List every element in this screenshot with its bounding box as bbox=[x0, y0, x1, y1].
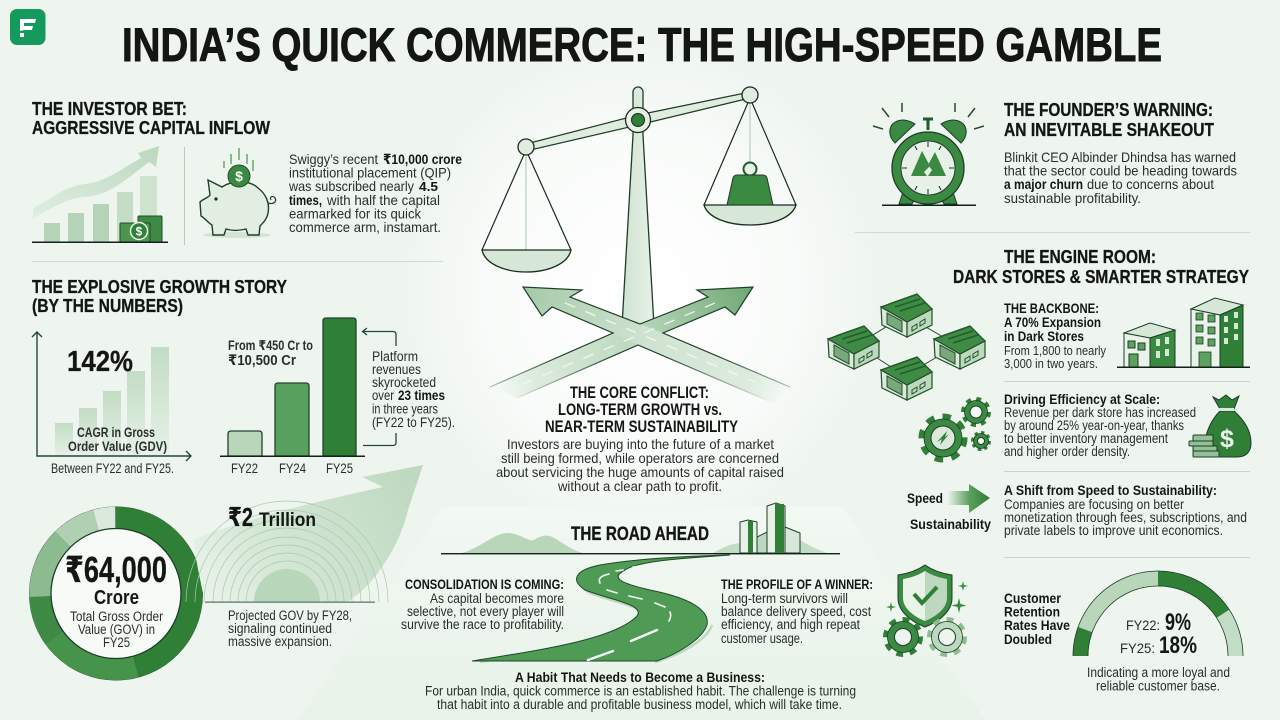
panel: the road ahead bbox=[401, 503, 873, 712]
illustration: winding road bbox=[472, 555, 730, 662]
text: a habit that needs to become a business: For urban India, quick commerce is an established habit. The challenge is turning bbox=[425, 684, 856, 698]
icon: buildings bbox=[1117, 298, 1250, 368]
chart: platform revenue bars: ₹10,500 Cr bbox=[228, 353, 296, 369]
icon: speed to sustainability arrow: Speed bbox=[907, 490, 943, 506]
text: core conflict: LONG-TERM GROWTH vs. bbox=[558, 401, 722, 419]
text: the profile of a winner: Long-term survivors will bbox=[721, 591, 848, 606]
text: platform revenues note: revenues bbox=[372, 362, 421, 377]
chart: total GOV donut: FY25 bbox=[103, 635, 130, 650]
text: the backbone: in Dark Stores bbox=[1004, 329, 1084, 344]
text: founder's warning: Blinkit CEO Albinder Dhindsa has warned bbox=[1004, 149, 1236, 165]
panel: the founder's warning bbox=[873, 100, 1237, 206]
text: the backbone bbox=[1004, 301, 1106, 371]
icon: shield with gears bbox=[886, 565, 968, 654]
text: investor bet body: with half the capital bbox=[326, 192, 440, 208]
chart: total GOV donut: ₹64,000 bbox=[65, 549, 167, 590]
heading: growth story: THE EXPLOSIVE GROWTH STORY bbox=[32, 277, 287, 297]
chart: projected growth arrow: Projected GOV by FY28, bbox=[228, 608, 352, 623]
heading: engine room bbox=[953, 247, 1249, 287]
text: platform revenues note: in three years bbox=[372, 402, 438, 416]
icon: piggy bank: $ bbox=[235, 168, 243, 184]
text: platform revenues note: over bbox=[372, 388, 394, 403]
chart: customer retention gauge: 9% bbox=[1165, 609, 1191, 636]
text: founder's warning: that the sector could be heading towards bbox=[1004, 162, 1237, 178]
text: platform revenues note bbox=[372, 349, 455, 430]
chart: customer retention gauge: FY25: bbox=[1120, 640, 1155, 656]
illustration: landscape and city bbox=[441, 503, 840, 554]
text: core conflict bbox=[496, 384, 784, 494]
text: a shift from speed to sustainability bbox=[1004, 482, 1247, 538]
text: a habit that needs to become a business: that habit into a durable and profitable business model, which will take time. bbox=[437, 697, 842, 712]
text: the backbone: From 1,800 to nearly bbox=[1004, 343, 1106, 358]
chart: total GOV donut: Value (GOV) in bbox=[78, 622, 155, 637]
text: investor bet body bbox=[288, 151, 462, 235]
text: platform revenues note: Platform bbox=[372, 349, 418, 364]
panel: the core conflict bbox=[482, 87, 796, 494]
text: a shift from speed to sustainability: private labels to improve unit economics. bbox=[1004, 523, 1223, 538]
chart: customer retention gauge: Retention bbox=[1004, 604, 1060, 620]
chart: total GOV donut: Crore bbox=[94, 587, 139, 609]
text: investor bet body: institutional placement (QIP) bbox=[289, 164, 451, 180]
chart: platform revenue bars: FY24 bbox=[279, 461, 306, 476]
icon: piggy bank bbox=[200, 148, 276, 238]
chart: platform revenue bars bbox=[220, 318, 365, 476]
chart: rising bars with arrow and cash bbox=[32, 146, 168, 243]
text: a shift from speed to sustainability: A Shift from Speed to Sustainability: bbox=[1004, 482, 1217, 498]
text: investor bet body: was subscribed nearly bbox=[288, 178, 414, 194]
chart: projected growth arrow bbox=[186, 465, 423, 649]
heading: growth story: (BY THE NUMBERS) bbox=[32, 296, 183, 316]
heading: investor bet: THE INVESTOR BET: bbox=[32, 99, 187, 119]
text: platform revenues note: skyrocketed bbox=[372, 375, 436, 390]
text: consolidation is coming: selective, not every player will bbox=[407, 604, 564, 619]
text: the backbone: THE BACKBONE: bbox=[1004, 301, 1099, 316]
chart: CAGR in gross order value: CAGR in Gross bbox=[77, 425, 155, 440]
text: founder's warning bbox=[1004, 100, 1237, 206]
text: a shift from speed to sustainability: monetization through fees, subscriptions, and bbox=[1004, 510, 1247, 525]
chart: customer retention gauge: Indicating a more loyal and bbox=[1087, 665, 1230, 680]
text: the profile of a winner: customer usage. bbox=[721, 631, 803, 646]
chart: customer retention gauge: reliable customer base. bbox=[1096, 678, 1220, 694]
chart: projected growth arrow: Trillion bbox=[259, 510, 316, 531]
chart: CAGR in gross order value: 142% bbox=[67, 346, 133, 378]
text: the profile of a winner: balance delivery speed, cost bbox=[721, 604, 871, 619]
icon: speed to sustainability arrow bbox=[907, 484, 991, 532]
text: platform revenues note: 23 times bbox=[398, 388, 445, 403]
chart: projected growth arrow: signaling continued bbox=[228, 621, 332, 636]
icon: alarm clock bbox=[873, 103, 984, 206]
text: driving efficiency: by around 25% year-on-year, thanks bbox=[1004, 418, 1184, 433]
text: the profile of a winner: THE PROFILE OF A WINNER: bbox=[721, 577, 873, 592]
chart: projected growth arrow: ₹2 bbox=[228, 502, 253, 532]
chart: customer retention gauge bbox=[1004, 571, 1243, 694]
text: consolidation is coming: As capital becomes more bbox=[430, 591, 564, 606]
chart: CAGR in gross order value: Order Value (GDV) bbox=[68, 439, 167, 454]
logo bbox=[10, 9, 46, 45]
icon: efficiency gears bbox=[922, 400, 989, 459]
text: consolidation is coming: survive the race to profitability. bbox=[401, 617, 564, 632]
text: investor bet body: 4.5 bbox=[419, 179, 438, 194]
illustration: balance scale bbox=[482, 87, 796, 326]
arrow: bracket annotation bbox=[362, 328, 396, 446]
heading: the road ahead: THE ROAD AHEAD bbox=[571, 524, 709, 545]
heading: engine room: THE ENGINE ROOM: bbox=[1004, 247, 1156, 267]
chart: platform revenue bars: FY22 bbox=[231, 461, 258, 476]
text: founder's warning: AN INEVITABLE SHAKEOUT bbox=[1004, 120, 1214, 140]
chart: rising bars with arrow and cash: $ bbox=[136, 224, 143, 238]
text: investor bet body: earmarked for its quick bbox=[289, 206, 422, 222]
text: investor bet body: times, bbox=[289, 192, 322, 208]
icon: dark store network bbox=[828, 294, 985, 400]
text: a habit that needs to become a business: A Habit That Needs to Become a Business: bbox=[515, 669, 765, 685]
chart: projected growth arrow: massive expansion. bbox=[228, 634, 332, 649]
heading: growth story bbox=[32, 277, 287, 316]
panel: the explosive growth story bbox=[29, 277, 455, 680]
chart: total GOV donut: Total Gross Order bbox=[70, 609, 163, 624]
chart: customer retention gauge: Customer bbox=[1004, 590, 1061, 606]
panel: the investor bet bbox=[32, 99, 462, 245]
chart: total GOV donut bbox=[29, 506, 203, 680]
text: driving efficiency: and higher order density. bbox=[1004, 444, 1130, 459]
chart: customer retention gauge: 18% bbox=[1159, 632, 1197, 659]
text: a habit that needs to become a business bbox=[425, 669, 856, 712]
text: core conflict: without a clear path to profit. bbox=[557, 478, 722, 494]
text: platform revenues note: (FY22 to FY25). bbox=[372, 415, 455, 430]
icon: money bag: $ bbox=[1220, 425, 1234, 453]
chart: platform revenue bars: FY25 bbox=[326, 461, 353, 476]
text: core conflict: about servicing the huge amounts of capital raised bbox=[496, 464, 784, 480]
icon: money bag bbox=[1189, 395, 1251, 457]
text: founder's warning: due to concerns about bbox=[1087, 176, 1214, 192]
text: consolidation is coming: CONSOLIDATION IS COMING: bbox=[405, 577, 564, 592]
heading: investor bet bbox=[32, 99, 270, 138]
panel: the engine room bbox=[828, 247, 1251, 694]
chart: platform revenue bars: From ₹450 Cr to bbox=[228, 338, 313, 353]
text: core conflict: Investors are buying into the future of a market bbox=[507, 436, 774, 452]
text: core conflict: still being formed, while operators are concerned bbox=[501, 450, 779, 466]
text: founder's warning: a major churn bbox=[1004, 176, 1083, 192]
text: consolidation is coming bbox=[401, 577, 564, 632]
text: a shift from speed to sustainability: Companies are focusing on better bbox=[1004, 497, 1184, 512]
text: investor bet body: Swiggy’s recent bbox=[289, 151, 378, 167]
text: core conflict: THE CORE CONFLICT: bbox=[570, 384, 709, 402]
text: founder's warning: sustainable profitability. bbox=[1004, 190, 1141, 206]
text: driving efficiency: to better inventory management bbox=[1004, 431, 1168, 446]
chart: CAGR in gross order value bbox=[32, 332, 191, 476]
text: driving efficiency bbox=[1004, 391, 1196, 459]
illustration: diverging road arrows bbox=[490, 287, 790, 403]
text: the profile of a winner bbox=[721, 577, 873, 646]
text: founder's warning: THE FOUNDER’S WARNING: bbox=[1004, 100, 1213, 120]
chart: customer retention gauge: Rates Have bbox=[1004, 617, 1070, 633]
text: the profile of a winner: efficiency, and high repeat bbox=[721, 617, 860, 632]
text: driving efficiency: Driving Efficiency at Scale: bbox=[1004, 391, 1160, 407]
text: the backbone: 3,000 in two years. bbox=[1004, 356, 1098, 371]
icon: speed to sustainability arrow: Sustainability bbox=[910, 516, 991, 532]
text: driving efficiency: Revenue per dark store has increased bbox=[1004, 405, 1196, 420]
chart: CAGR in gross order value: Between FY22 and FY25. bbox=[51, 461, 174, 476]
heading: investor bet: AGGRESSIVE CAPITAL INFLOW bbox=[32, 118, 270, 138]
chart: customer retention gauge: FY22: bbox=[1126, 617, 1160, 633]
chart: customer retention gauge: Doubled bbox=[1004, 631, 1052, 647]
text: core conflict: NEAR-TERM SUSTAINABILITY bbox=[545, 418, 738, 436]
text: investor bet body: ₹10,000 crore bbox=[383, 151, 462, 167]
text: investor bet body: commerce arm, instamart. bbox=[289, 219, 441, 235]
text: the backbone: A 70% Expansion bbox=[1004, 315, 1101, 330]
